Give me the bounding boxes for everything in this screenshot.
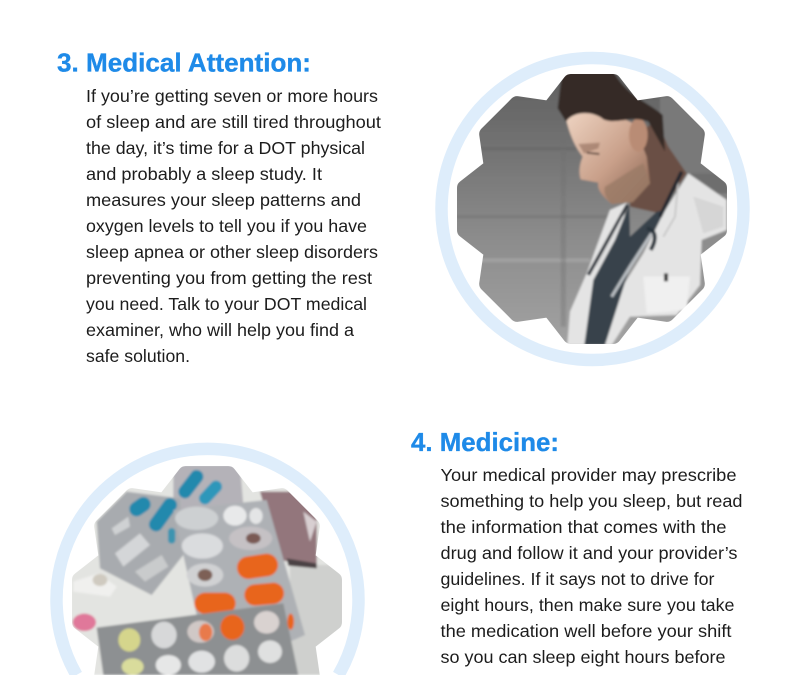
- face: [565, 112, 650, 204]
- lower blister pack: [97, 603, 298, 675]
- upper-left blister pack: [97, 492, 183, 595]
- heading: 4. Medicine: 4. Medicine:: [411, 427, 559, 457]
- text block: medical attention body: you need. Talk to your DOT medical: [86, 294, 367, 314]
- text block: medical attention body: preventing you from getting the rest: [86, 268, 372, 288]
- text block: medical attention body: [86, 86, 381, 366]
- text block: medical attention body: sleep apnea or other sleep disorders: [86, 242, 378, 262]
- pink pill: [73, 614, 96, 631]
- icon: light blue ring around doctor photo: [442, 58, 744, 360]
- text block: medical attention body: measures your sleep patterns and: [86, 190, 361, 210]
- panel: medical attention: [57, 48, 744, 366]
- text block: medical attention body: oxygen levels to tell you if you have: [86, 216, 367, 236]
- text block: medicine body: the medication well before your shift: [440, 621, 732, 641]
- heading: 3. Medical Attention: 3. Medical Attention:: [57, 48, 311, 78]
- text block: medical attention body: of sleep and are still tired throughout: [86, 112, 381, 132]
- top foil with blue capsules: [172, 466, 244, 510]
- icon: light blue ring around pills photo: [56, 449, 358, 675]
- text block: medical attention body: the day, it’s time for a DOT physical: [86, 138, 365, 158]
- text block: medicine body: so you can sleep eight hours before: [440, 647, 726, 667]
- maroon foil: [260, 492, 317, 567]
- photo: blister packs of pills in gear-shaped frame: [70, 465, 347, 675]
- text block: medicine body: Your medical provider may prescribe: [440, 465, 736, 485]
- stethoscope: [660, 172, 682, 217]
- text block: medicine body: the information that comes with the: [440, 517, 726, 537]
- text block: medical attention body: If you’re getting seven or more hours: [86, 86, 378, 106]
- scrubs: [584, 205, 665, 345]
- photo: doctor with stethoscope in gear-shaped frame: [450, 70, 730, 348]
- text block: medical attention body: and probably a sleep study. It: [86, 164, 322, 184]
- text block: medical attention body: safe solution.: [86, 346, 190, 366]
- text block: medicine body: guidelines. If it says not to drive for: [440, 569, 715, 589]
- coat: [567, 173, 727, 345]
- text block: medicine body: drug and follow it and your provider’s: [440, 543, 738, 563]
- text block: medicine body: eight hours, then make sure you take: [440, 595, 734, 615]
- text block: medicine body: [440, 465, 742, 667]
- neck and dark back of head: [630, 120, 687, 213]
- text block: medicine body: something to help you sleep, but read: [440, 491, 742, 511]
- text block: medical attention body: examiner, who will help you find a: [86, 320, 354, 340]
- capsules blue: [185, 477, 197, 492]
- hair: [558, 70, 665, 152]
- panel: medicine: [56, 427, 742, 675]
- center blister pack: [173, 500, 305, 642]
